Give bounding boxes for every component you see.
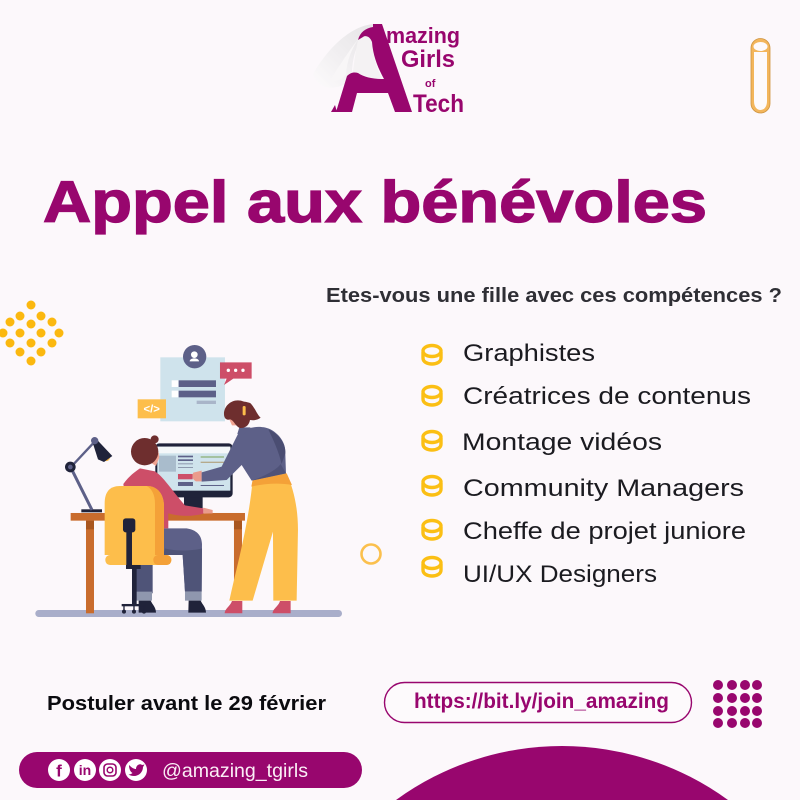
title: Appel aux bénévoles bbox=[43, 170, 707, 235]
profile card bbox=[160, 345, 225, 421]
illustration: two people at a computer bbox=[35, 345, 342, 617]
icon: facebook bbox=[48, 759, 70, 781]
list of skills bbox=[423, 340, 751, 588]
logo: Amazing Girls of Tech: Girls bbox=[401, 46, 455, 73]
floor bbox=[35, 610, 342, 617]
link button bbox=[384, 682, 692, 722]
monitor bbox=[155, 443, 233, 508]
lamp bbox=[65, 437, 112, 512]
dot grid bbox=[713, 680, 762, 728]
logo: Amazing Girls of Tech: Tech bbox=[413, 90, 464, 118]
icon: twitter bbox=[125, 759, 147, 781]
seated person bbox=[123, 435, 213, 613]
standing person bbox=[193, 400, 298, 613]
item: Montage vidéos: Montage vidéos bbox=[462, 429, 662, 456]
social media bar bbox=[19, 752, 362, 788]
item: Graphistes bbox=[423, 340, 595, 367]
logo: Amazing Girls of Tech bbox=[313, 23, 464, 118]
deadline text: Postuler avant le 29 février bbox=[47, 693, 326, 715]
item: Cheffe de projet juniore: Cheffe de projet juniore bbox=[463, 518, 746, 545]
decorative bottom semicircle bbox=[396, 746, 728, 800]
icon: instagram bbox=[99, 759, 121, 781]
item: Créatrices de contenus: Créatrices de contenus bbox=[463, 383, 751, 410]
code tag: </> bbox=[143, 404, 160, 416]
chat bubble bbox=[220, 362, 252, 385]
decorative ring bbox=[362, 544, 380, 564]
icon: gold tube bbox=[751, 38, 770, 113]
icon: facebook: f bbox=[56, 762, 62, 780]
item: Community Managers: Community Managers bbox=[463, 475, 744, 502]
office chair bbox=[105, 486, 171, 614]
code tag bbox=[138, 399, 166, 418]
logo: Amazing Girls of Tech: of bbox=[425, 78, 436, 90]
item: Graphistes: Graphistes bbox=[463, 340, 595, 367]
logo: Amazing Girls of Tech: mazing bbox=[386, 23, 460, 48]
item: UI/UX Designers: UI/UX Designers bbox=[463, 561, 657, 588]
social media bar: @amazing_tgirls bbox=[162, 760, 308, 782]
icon: linkedin: in bbox=[79, 762, 91, 778]
question heading: Etes-vous une fille avec ces compétences ? bbox=[326, 285, 782, 307]
link button: https://bit.ly/join_amazing bbox=[414, 690, 669, 713]
dot pattern: yellow diamond bbox=[0, 300, 64, 366]
icon: linkedin bbox=[74, 759, 96, 781]
item: UI/UX Designers bbox=[423, 558, 657, 588]
desk bbox=[71, 513, 245, 613]
